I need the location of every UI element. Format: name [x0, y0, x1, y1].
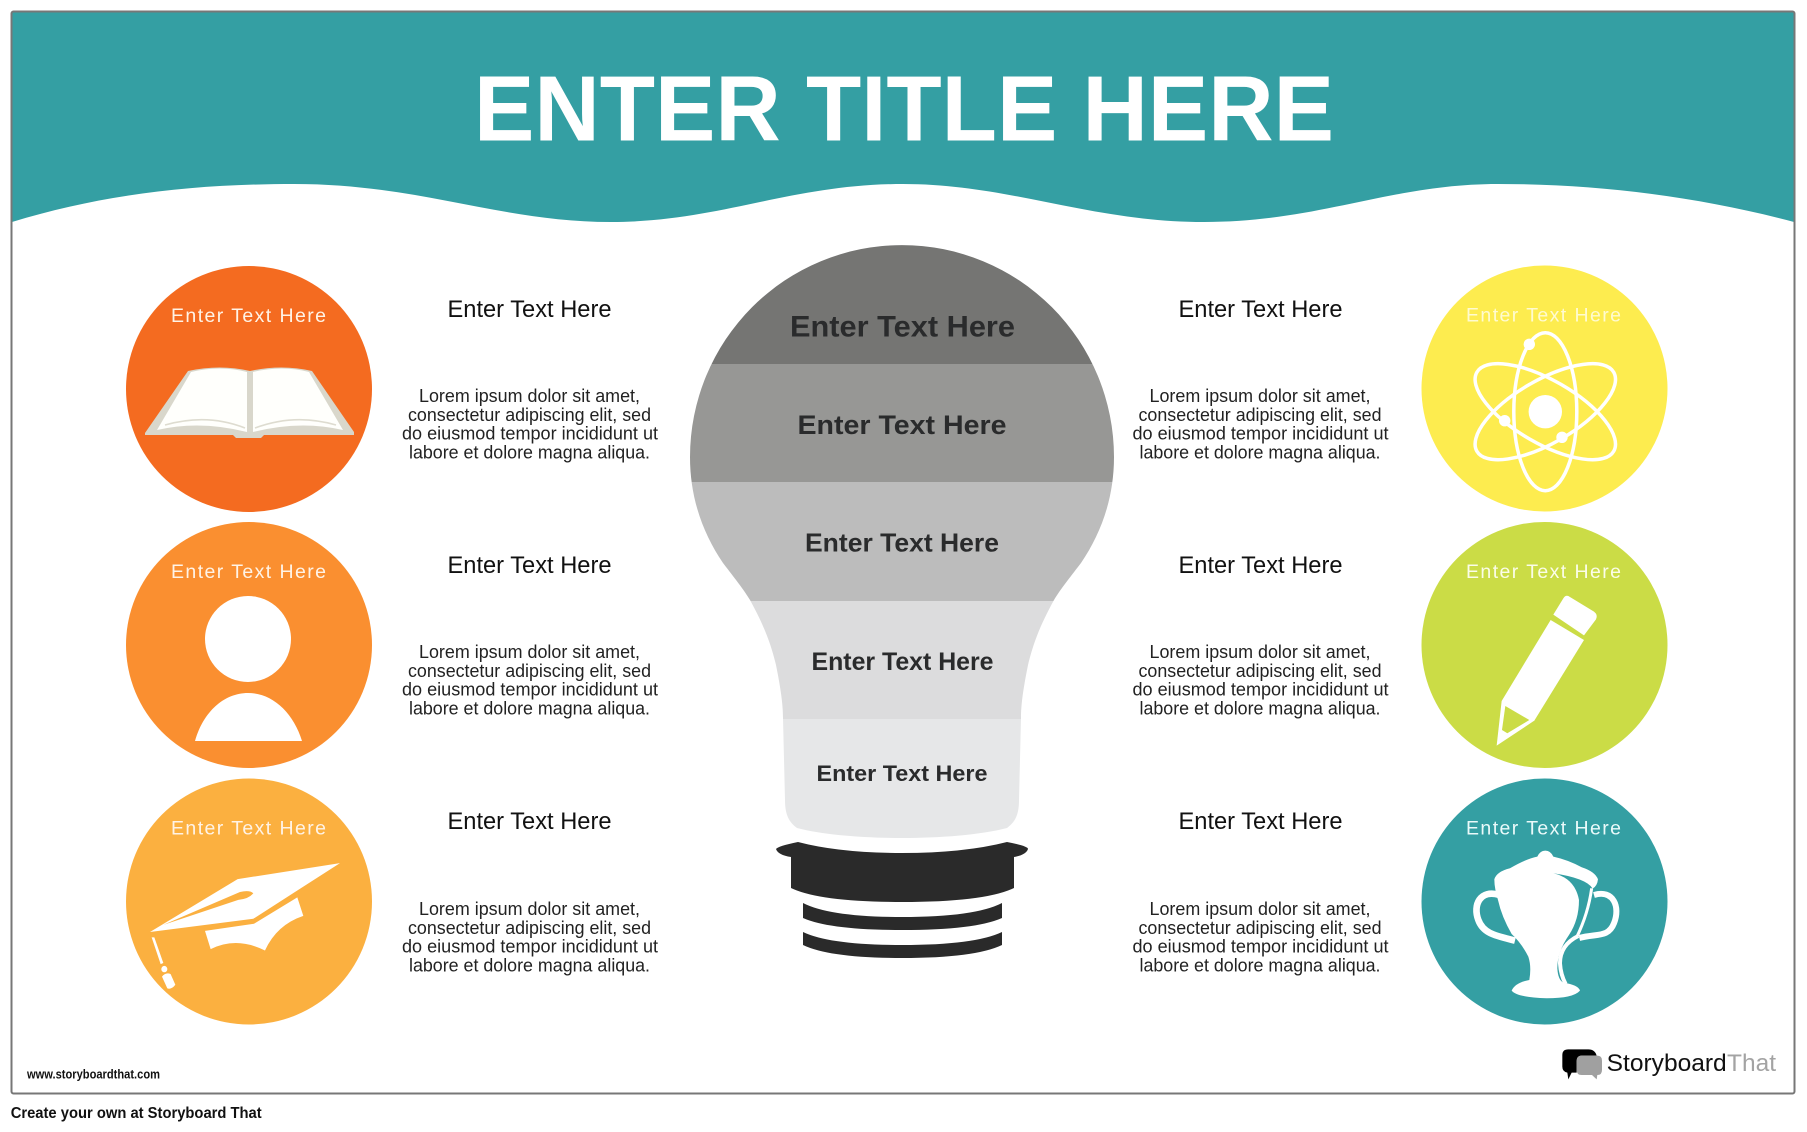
circle label: Enter Text Here	[171, 561, 326, 583]
heading: Enter Text Here	[1178, 552, 1342, 579]
body text: Lorem ipsum dolor sit amet,	[1150, 641, 1370, 662]
icon: open book	[145, 368, 354, 438]
bulb band label 5: Enter Text Here	[816, 761, 988, 786]
bulb band label 2: Enter Text Here	[798, 410, 1006, 440]
bulb band label 4: Enter Text Here	[812, 648, 994, 676]
heading: Enter Text Here	[448, 808, 612, 835]
heading: Enter Text Here	[448, 296, 612, 323]
body text: do eiusmod tempor incididunt ut	[402, 936, 658, 956]
body text: do eiusmod tempor incididunt ut	[402, 678, 658, 700]
heading: Enter Text Here	[448, 552, 612, 579]
footer credit: Create your own at Storyboard That	[11, 1105, 262, 1122]
panel: row 1 right text	[1132, 296, 1388, 462]
body text: Lorem ipsum dolor sit amet,	[419, 385, 640, 406]
icon: trophy	[1476, 851, 1616, 998]
body text: labore et dolore magna aliqua.	[409, 954, 650, 976]
body text: Lorem ipsum dolor sit amet,	[1150, 898, 1370, 919]
icon: pencil	[1497, 596, 1597, 746]
heading: Enter Text Here	[1178, 808, 1342, 835]
body text: Lorem ipsum dolor sit amet,	[419, 898, 640, 919]
orange circle	[126, 778, 372, 1024]
body text: do eiusmod tempor incididunt ut	[1132, 422, 1388, 444]
body text: consectetur adipiscing elit, sed	[408, 660, 651, 681]
panel: row 3 right text	[1132, 808, 1388, 976]
panel: row 3 left	[126, 778, 372, 1024]
bulb band label 3: Enter Text Here	[805, 528, 999, 558]
body text: consectetur adipiscing elit, sed	[408, 917, 651, 938]
body text: labore et dolore magna aliqua.	[409, 442, 650, 462]
panel: row 2 left text	[402, 552, 658, 718]
circle label: Enter Text Here	[171, 305, 326, 327]
logo icon: speech bubbles	[1562, 1049, 1602, 1079]
panel: row 3 left text	[402, 808, 658, 976]
body text: do eiusmod tempor incididunt ut	[1132, 678, 1388, 700]
lime circle	[1422, 522, 1668, 768]
website url: www.storyboardthat.com	[26, 1067, 160, 1082]
panel: row 2 right	[1422, 522, 1668, 768]
logo wordmark grey: That	[1727, 1050, 1776, 1077]
panel: row 1 left text	[402, 296, 658, 462]
circle label: Enter Text Here	[1466, 305, 1621, 327]
orange circle	[126, 266, 372, 512]
teal circle	[1422, 778, 1668, 1024]
body text: Lorem ipsum dolor sit amet,	[419, 641, 640, 662]
circle label: Enter Text Here	[171, 818, 326, 840]
body text: do eiusmod tempor incididunt ut	[1132, 936, 1388, 956]
body text: labore et dolore magna aliqua.	[1140, 954, 1380, 976]
icon: person	[195, 596, 302, 741]
panel: row 1 right	[1422, 266, 1668, 512]
body text: consectetur adipiscing elit, sed	[408, 404, 651, 425]
logo: Storyboard That	[1562, 1049, 1776, 1079]
panel: row 2 left	[126, 522, 372, 768]
circle label: Enter Text Here	[1466, 818, 1621, 840]
body text: labore et dolore magna aliqua.	[409, 698, 650, 718]
icon: graduation cap	[150, 863, 340, 989]
heading: Enter Text Here	[1178, 296, 1342, 323]
circle label: Enter Text Here	[1466, 561, 1621, 583]
body text: consectetur adipiscing elit, sed	[1138, 917, 1382, 938]
icon: atom	[1461, 333, 1629, 491]
light bulb	[680, 240, 1124, 958]
bulb glass bands	[680, 240, 1124, 844]
logo wordmark dark: Storyboard	[1607, 1050, 1727, 1077]
body text: do eiusmod tempor incididunt ut	[402, 422, 658, 444]
body text: Lorem ipsum dolor sit amet,	[1150, 385, 1370, 406]
body text: consectetur adipiscing elit, sed	[1138, 404, 1382, 425]
bulb band label 1: Enter Text Here	[790, 311, 1015, 344]
bulb screw base	[776, 842, 1028, 958]
body text: labore et dolore magna aliqua.	[1140, 442, 1380, 462]
yellow circle	[1422, 266, 1668, 512]
header wave banner	[12, 12, 1794, 222]
panel: row 1 left	[126, 266, 372, 512]
body text: labore et dolore magna aliqua.	[1140, 698, 1380, 718]
body text: consectetur adipiscing elit, sed	[1138, 660, 1382, 681]
panel: row 3 right	[1422, 778, 1668, 1024]
panel: row 2 right text	[1132, 552, 1388, 718]
title: ENTER TITLE HERE	[474, 56, 1334, 160]
orange circle	[126, 522, 372, 768]
